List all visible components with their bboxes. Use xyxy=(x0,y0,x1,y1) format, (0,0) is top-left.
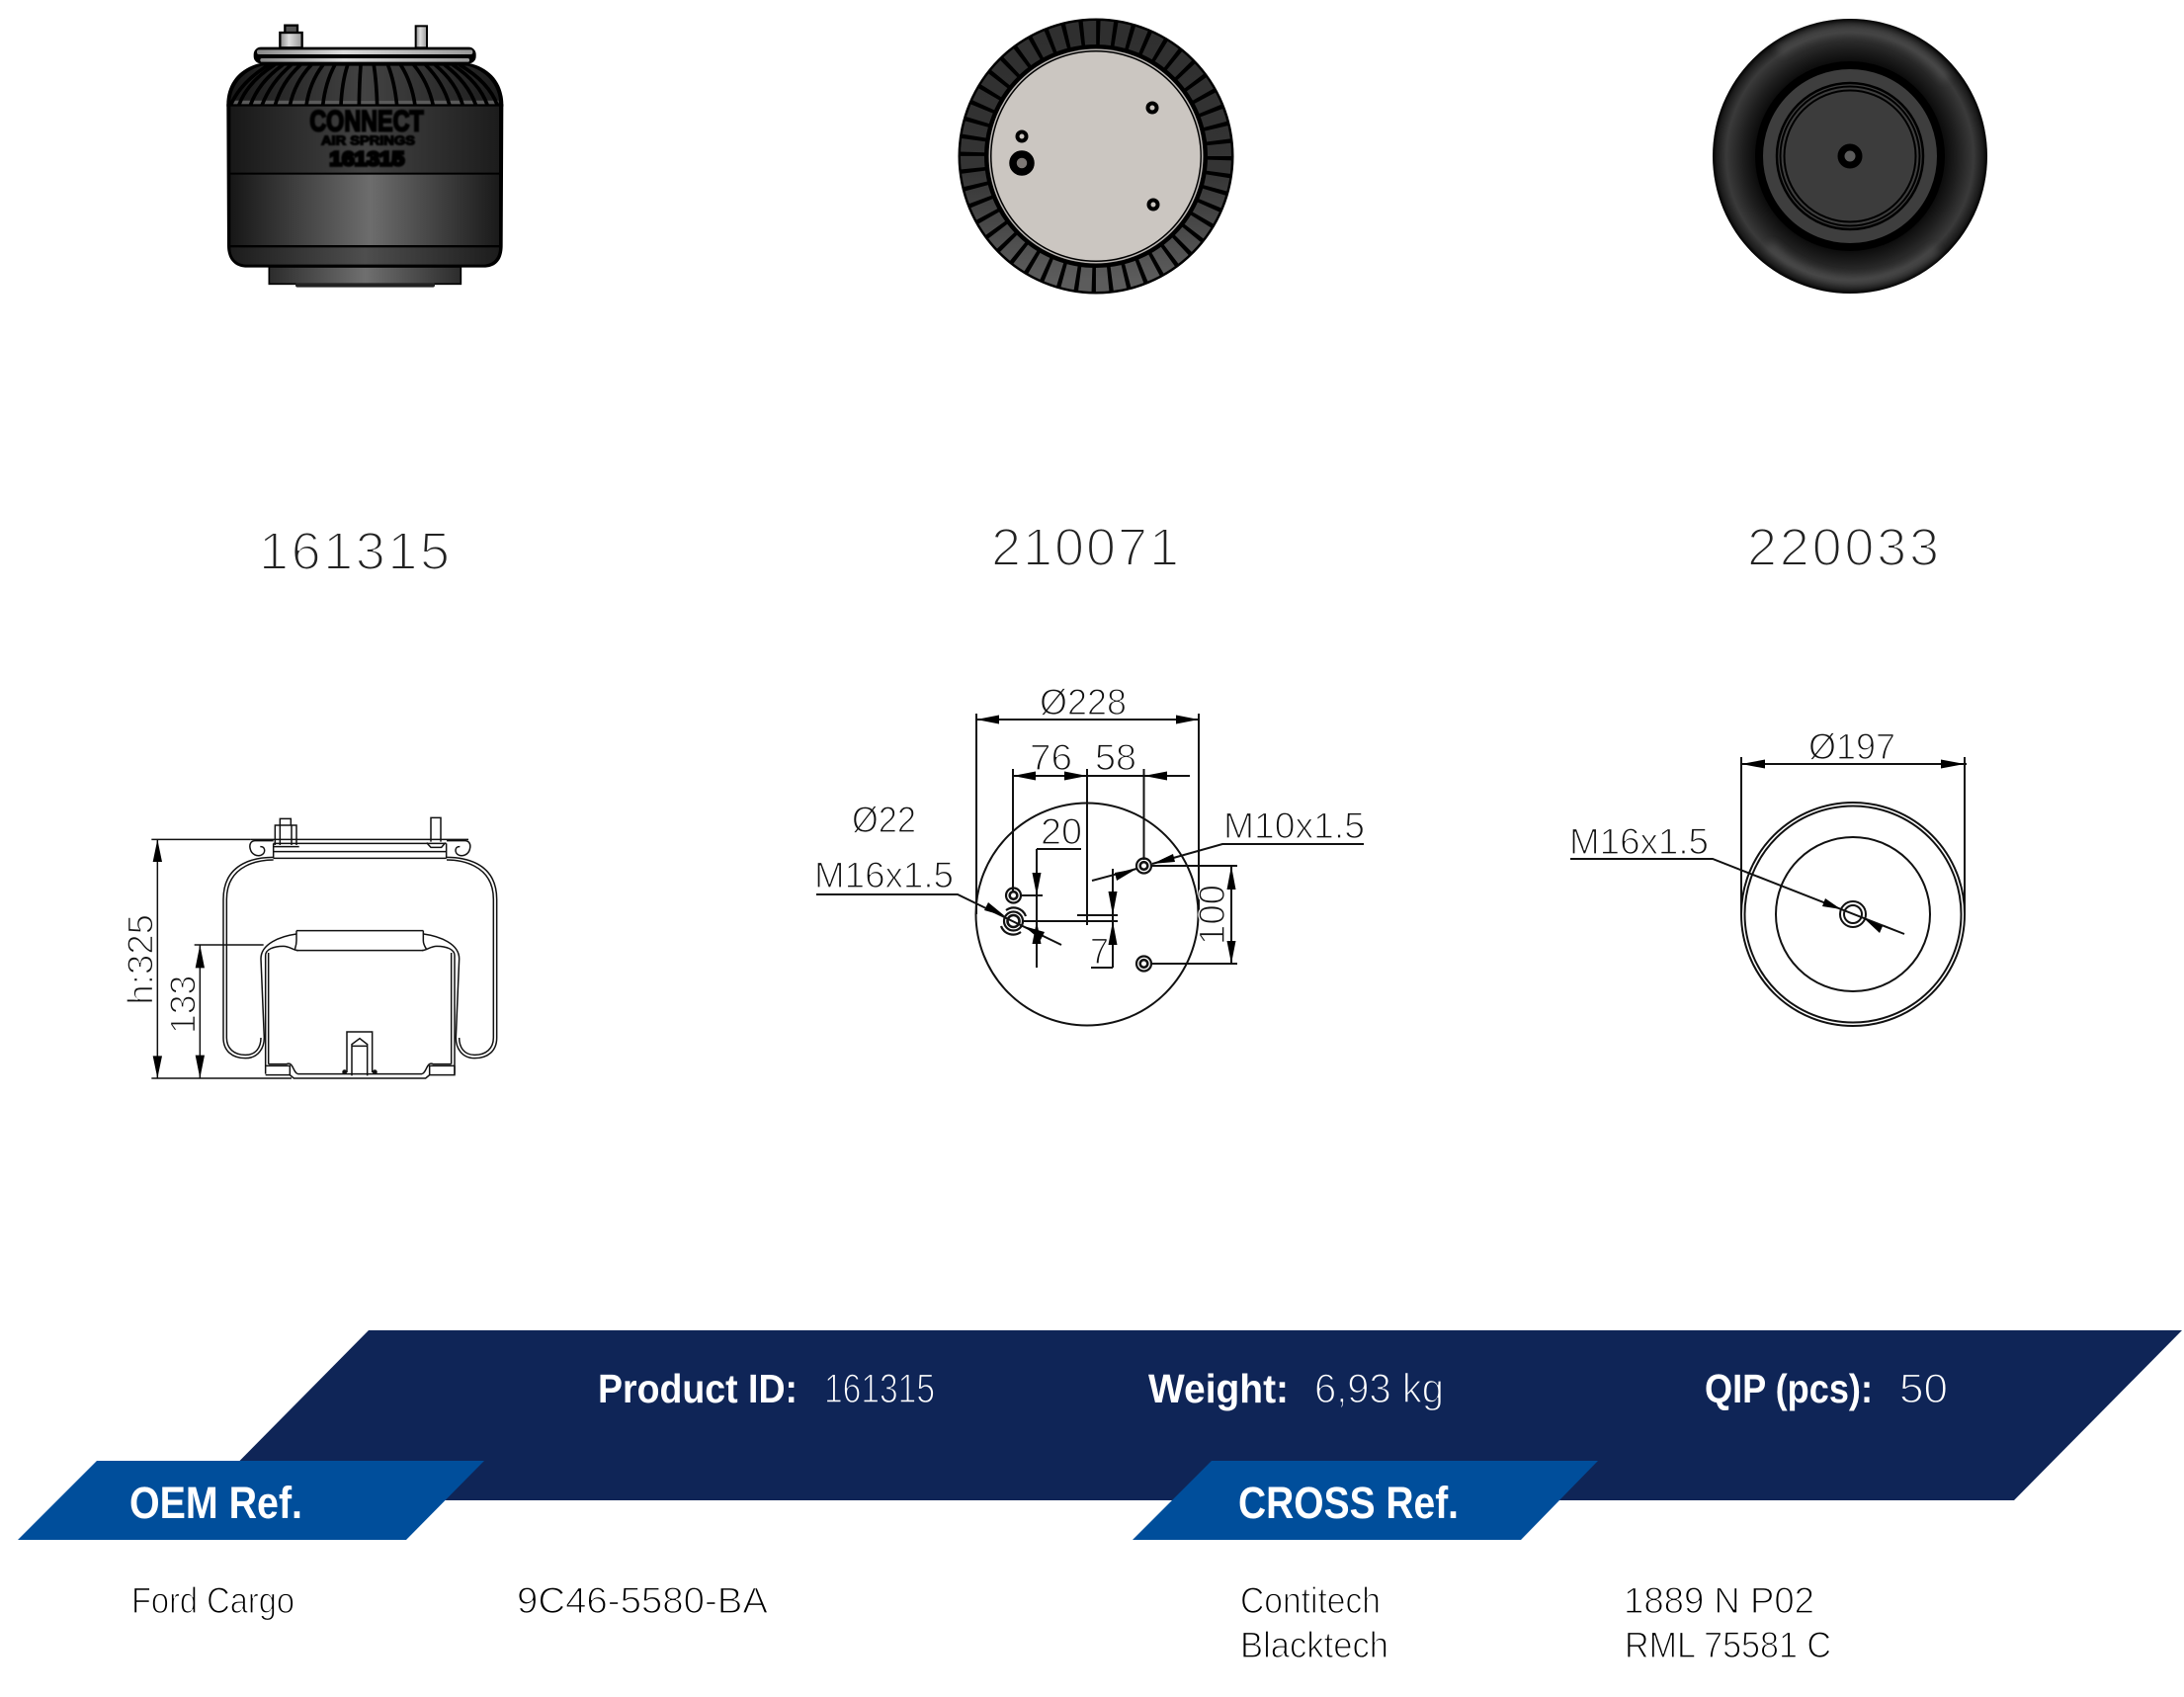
label: Ø228: Ø228 xyxy=(1040,682,1127,722)
dimension text: h:325: h:325 xyxy=(120,914,160,1005)
logo moulded on bellows: 161315 xyxy=(329,148,404,171)
heading tab: CROSS Ref. xyxy=(1133,1461,1598,1540)
label: Product ID: Product ID: xyxy=(598,1366,798,1411)
label: Ø22: Ø22 xyxy=(852,800,916,840)
label: Weight: Weight: xyxy=(1148,1366,1289,1411)
dimension: 20: 20 xyxy=(1041,811,1082,852)
plate disc xyxy=(986,47,1206,265)
dimension: 7 xyxy=(1077,869,1118,972)
finned rubber ring xyxy=(959,18,1233,295)
text block: OEM references: Ford Cargo xyxy=(131,1580,294,1621)
piston disc xyxy=(1759,65,1941,247)
heading tab: OEM Ref. xyxy=(18,1461,484,1540)
icon: centre stud hole xyxy=(1841,147,1859,165)
dimension: 7: 7 xyxy=(1090,931,1109,972)
text block: cross references xyxy=(1240,1580,1831,1665)
label: Ø197: Ø197 xyxy=(1808,726,1895,767)
drawing: air spring section with height dimensions xyxy=(120,817,497,1078)
logo moulded on bellows: CONNECT xyxy=(309,106,424,138)
value: QIP: 50 xyxy=(1899,1365,1948,1411)
text block: cross references: RML 75581 C xyxy=(1625,1625,1831,1665)
plate outline xyxy=(976,803,1198,1026)
text block: OEM references xyxy=(131,1580,768,1621)
bellows body xyxy=(226,63,503,268)
photo: piston bottom view xyxy=(1713,19,1987,294)
logo moulded on bellows: AIR SPRINGS xyxy=(321,132,415,147)
label: 100: 100 xyxy=(1192,885,1232,945)
part number: bead plate: 210071 xyxy=(991,518,1179,577)
panel: product info banner xyxy=(201,1330,2182,1500)
icon: mounting studs xyxy=(280,26,427,47)
label: 58: 58 xyxy=(1095,737,1136,778)
dimension: 100 xyxy=(1152,866,1237,964)
text block: cross references: Contitech xyxy=(1240,1580,1381,1621)
icon: plate holes xyxy=(1001,858,1151,971)
tyre-like outer bellows xyxy=(1713,19,1987,294)
callout: M10x1.5: M10x1.5 xyxy=(1223,806,1365,846)
logo moulded on bellows xyxy=(309,106,424,171)
part number: piston: 220033 xyxy=(1747,518,1939,577)
callout: M16x1.5 xyxy=(1569,821,1904,934)
heading tab: CROSS Ref.: CROSS Ref. xyxy=(1238,1478,1459,1528)
dimension: diameter 197 xyxy=(1741,726,1967,914)
photo: bead plate top view xyxy=(959,18,1233,295)
photo: air spring side view xyxy=(226,26,503,288)
bellows and piston outline xyxy=(223,817,497,1078)
text block: cross references: Blacktech xyxy=(1240,1625,1388,1665)
heading tab: OEM Ref.: OEM Ref. xyxy=(129,1478,302,1528)
bead plate flange xyxy=(254,47,476,63)
callout: M10x1.5 xyxy=(1092,806,1365,881)
lower piston xyxy=(269,267,461,288)
callout: M16x1.5: M16x1.5 xyxy=(1569,821,1709,862)
callout: M16x1.5: M16x1.5 xyxy=(814,855,954,895)
icon: mounting holes xyxy=(1013,103,1158,210)
text block: OEM references: 9C46-5580-BA xyxy=(517,1580,768,1621)
dimension text: 133: 133 xyxy=(162,976,203,1034)
drawing: piston with diameter dimension xyxy=(1569,726,1967,1026)
piston outline xyxy=(1741,803,1965,1026)
value: product id: 161315 xyxy=(824,1365,935,1411)
dimension: 20 xyxy=(1020,811,1118,968)
drawing: bead plate with hole dimensions xyxy=(814,682,1365,1026)
dimension: diameter 228 xyxy=(976,682,1199,914)
label: QIP: QIP (pcs): xyxy=(1705,1366,1873,1411)
part number: air spring: 161315 xyxy=(259,522,450,581)
callout: M16x1.5 xyxy=(814,855,1061,945)
value: weight: 6,93 kg xyxy=(1314,1365,1444,1411)
height dimensions xyxy=(120,839,292,1078)
dimension: 76 and 58 xyxy=(1013,737,1190,925)
label: 76: 76 xyxy=(1030,737,1072,778)
text block: cross references: 1889 N P02 xyxy=(1624,1580,1814,1621)
